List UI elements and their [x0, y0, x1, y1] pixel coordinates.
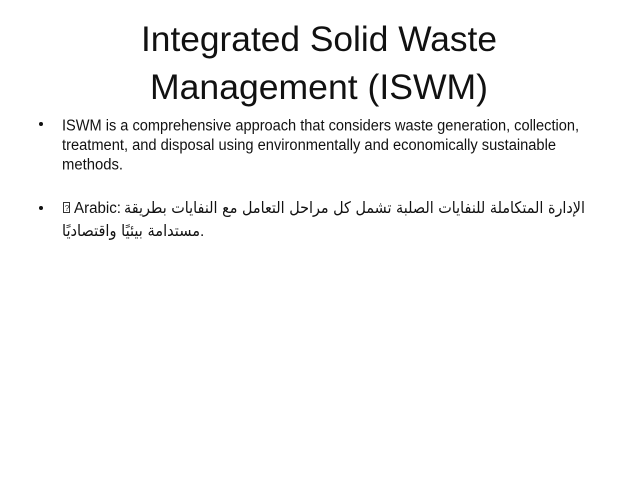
bullet: Arabic definition — [39, 198, 585, 241]
text block: Arabic translation: الإدارة المتكاملة للنفايات الصلبة تشمل كل مراحل التعامل مع النفايات بطريقة — [124, 198, 585, 218]
text block: ISWM description: treatment, and disposal using environmentally and economically sustainable — [62, 137, 556, 154]
text block: Arabic translation: Arabic: — [74, 200, 121, 217]
text block: Arabic translation: . — [200, 223, 204, 240]
bullet marker — [39, 122, 43, 126]
text block: ISWM description: methods. — [62, 156, 123, 174]
bullet: English definition — [39, 118, 579, 174]
text block: Arabic translation: مستدامة بيئيًا واقتصاديًا — [62, 221, 200, 241]
icon: missing glyph box — [64, 202, 70, 213]
text block: ISWM description — [62, 118, 579, 174]
text block: ISWM description: ISWM is a comprehensive approach that considers waste generation, collection, — [62, 118, 579, 134]
title: Integrated Solid Waste — [141, 20, 497, 59]
icon: missing glyph box: ? — [65, 204, 70, 213]
title — [141, 20, 497, 107]
title: Management (ISWM) — [150, 68, 488, 107]
text block: Arabic translation — [62, 198, 585, 241]
bullet marker — [39, 206, 43, 210]
